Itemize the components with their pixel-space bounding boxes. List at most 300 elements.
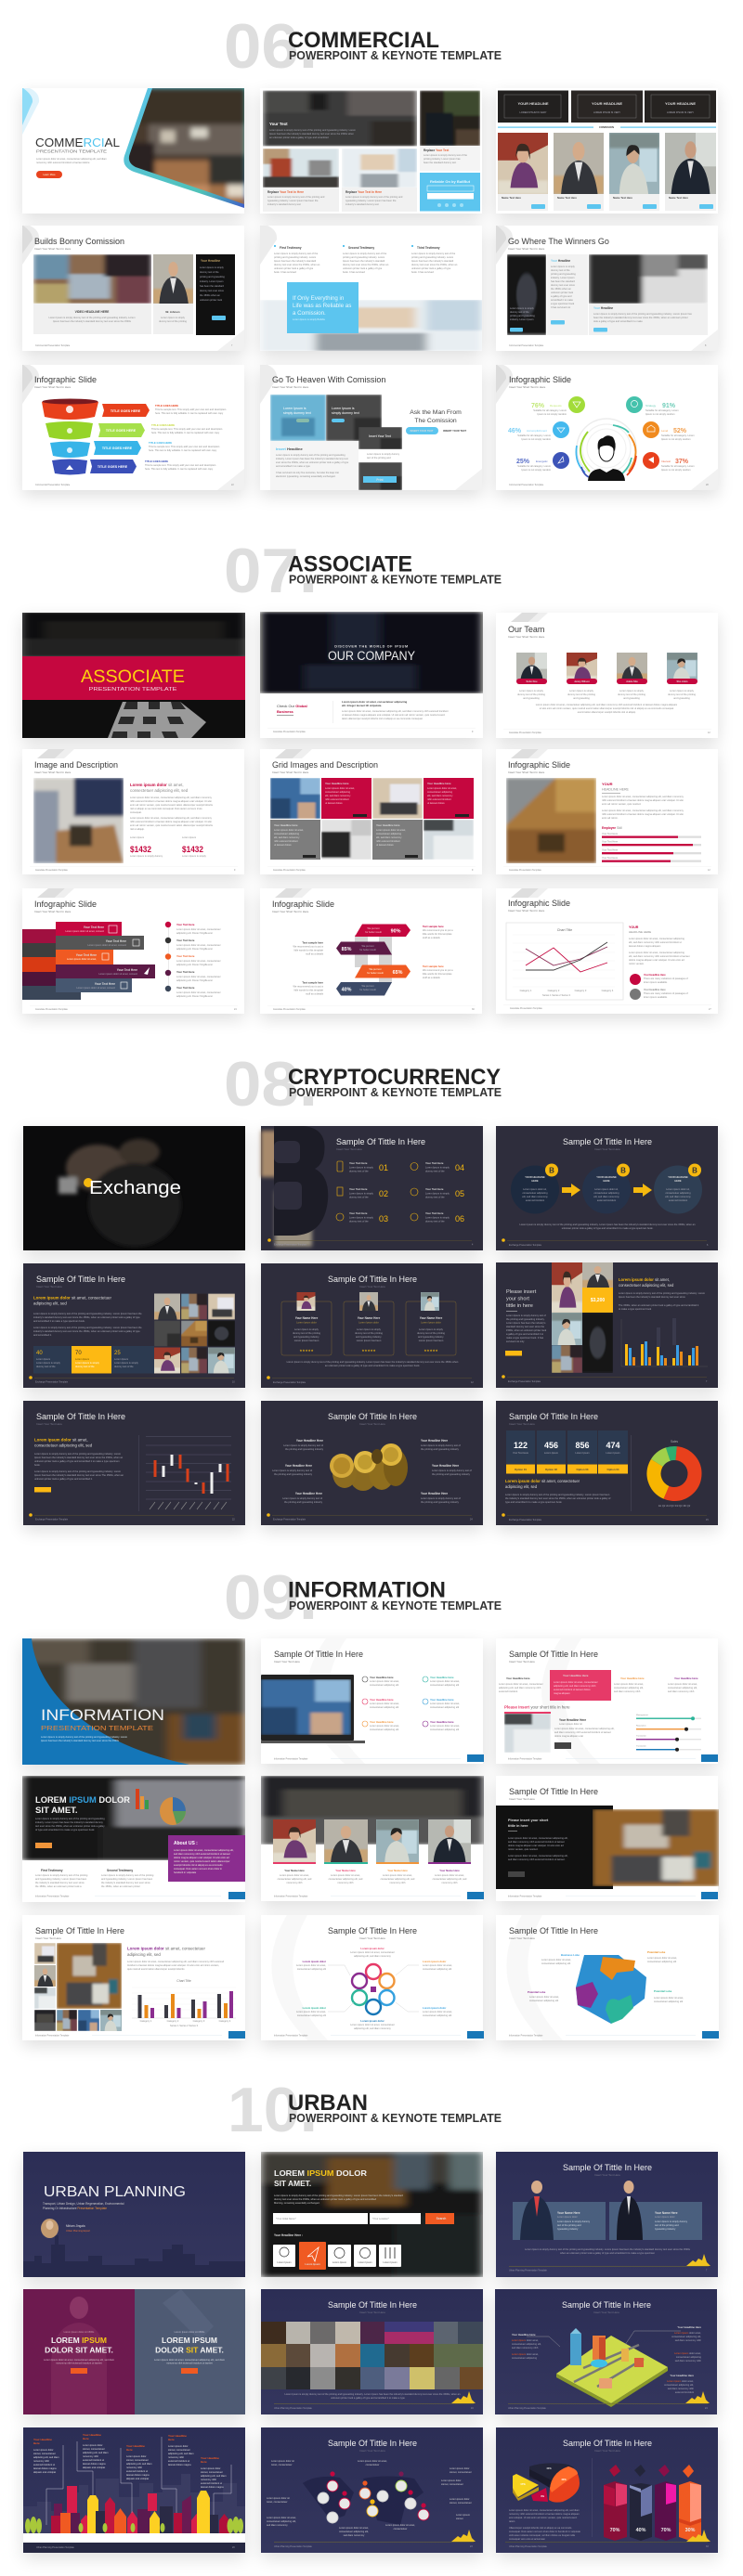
slide: line chart: Lorem ipsum dolor sit amet, consectetuer adipiscing <box>629 951 684 954</box>
slide: arrows percentages: stuff as a details <box>423 936 440 939</box>
slide: crypto agenda: Exchange Presentation Template <box>274 1244 307 1246</box>
slide: arrows percentages: Text sample here <box>423 964 444 968</box>
slide: go where the winners go: industry. Lorem Ipsum <box>510 317 533 321</box>
sliders: Reputation <box>636 1725 646 1727</box>
agenda items: Lorem Ipsum is simply <box>425 1166 450 1170</box>
slide: commercial cover: PRESENTATION TEMPLATE <box>36 149 107 154</box>
slide: crypto coins: Your Headline Here <box>296 1439 323 1443</box>
slide: crypto team cards: Lorem Ipsum is simply dummy text of the printing and typesetting industry. Lorem Ipsum has been the industry's standard dummy text ever since the 1500s when <box>287 1360 459 1364</box>
slide: information split panel: sed diam nonummy nibh euismod tincidunt ut laoreet <box>508 1840 565 1844</box>
slide: commercial testimonies: Ipsum has been the industry's standard <box>274 259 317 263</box>
slide: funnel infographic: This be sample text. This simply add your own text and description <box>149 445 220 448</box>
slide: commercial testimonies: dummy text ever since the 1500s, when an <box>343 263 389 266</box>
slide: commercial photo grid: Ipsum has been the industry's standard dummy text ever since the 1500s when <box>269 132 354 136</box>
slide: crypto candlestick: Exchange Presentation Template <box>35 1519 69 1521</box>
slide: stacked bars infographic <box>22 888 244 1014</box>
slide: urban world map: sed diam nonummy <box>344 2533 365 2537</box>
team cards: Your Name Here <box>420 1316 443 1320</box>
slide: information sliders: Lorem ipsum dolor sit amet, consectetuer <box>499 1682 543 1686</box>
slide: information team: consectetuer adipiscing elit, sed <box>433 1877 467 1881</box>
slide: stacked bars infographic: Your Text Here <box>176 938 195 942</box>
slide: about us: and typesetting industry. Lorem Ipsum has been <box>101 1877 153 1881</box>
team cards: Lorem Ipsum is simply <box>294 1327 319 1331</box>
slide: commercial infographic circle: Requests <box>550 404 562 408</box>
slide: go to heaven: simply dummy text <box>283 411 311 415</box>
slide: urban mosaic: Sample Of Tittle In Here <box>328 2300 417 2310</box>
agenda items: Your Text Here <box>349 1187 368 1191</box>
slide: information sliders: Your Headline Here <box>563 1674 589 1677</box>
callouts: adipiscing elit, sed diam <box>168 2452 194 2455</box>
slide: funnel infographic: Commercial Presentation Template <box>35 484 71 486</box>
slide: arrows percentages: Associate Presentation Template <box>273 1008 306 1011</box>
slide: go to heaven: Lorem Ipsum is simply dummy text of the printing and typesetting <box>276 453 345 457</box>
slide: our team: Associate Presentation Template <box>509 731 541 734</box>
slide: our team: Lorem Ipsum is simply <box>619 689 645 693</box>
slide: crypto stats and photos: and scrambled it to make a type specimen book. <box>33 1319 85 1323</box>
slide: crypto coins: the printing and typesetting industry <box>274 1472 313 1476</box>
slide: information sliders: Please insert your short title in here <box>504 1704 570 1710</box>
3d bars <box>604 2465 701 2541</box>
3d pie: 40% <box>561 2478 567 2481</box>
slide: urban isometric city: consectetuer adipiscing elit, <box>512 2342 541 2346</box>
callouts: laoreet dolore magna <box>33 2466 57 2470</box>
slide: commercial infographic circle: 52% <box>673 428 687 434</box>
slide: crypto photos and bars: Lorem Ipsum is simply dummy text of <box>506 1314 546 1317</box>
stat columns: Option 02 <box>545 1468 557 1471</box>
slide: urban team: Insert Your Text Here <box>594 2173 620 2177</box>
slide: urban search: *Your Location* <box>372 2217 389 2220</box>
callouts: sismet, consectetuer <box>33 2452 56 2455</box>
callouts: Your Headline <box>168 2434 187 2438</box>
slide: urban world map: Lorem ipsum dolor sit amet, <box>358 2459 387 2463</box>
slide: information team: nonummy nibh <box>286 1881 303 1884</box>
slide: crypto candlestick: 22 <box>232 1519 235 1521</box>
slide: grid images and description: consectetuer adipiscing <box>274 832 300 835</box>
slide: about us: About US : <box>174 1841 198 1846</box>
slide: urban world map: Lorem ipsum dolor sit <box>271 2459 294 2463</box>
slide: builds bonny comission: Lorem Ipsum is simply <box>161 316 186 319</box>
callouts: nonummy nibh <box>126 2466 143 2469</box>
slide: crypto photos and bars: consectetuer adipiscing elit, sed <box>619 1283 674 1288</box>
slide: urban team: 7 <box>706 2269 708 2272</box>
callouts: Here <box>83 2437 89 2440</box>
arrow blocks: for better result <box>367 971 384 975</box>
slide: urban world map: 23 <box>470 2545 473 2548</box>
callouts <box>33 2433 231 2525</box>
slide: commercial infographic circle: 28 <box>706 484 709 486</box>
team cards: Lorem Ipsum has been <box>357 1339 382 1342</box>
slide: about us: text ever since the 1500s, when an unknown printer took a galley <box>35 1824 105 1828</box>
callouts: euismod tincidunt ut <box>201 2481 222 2485</box>
slide: our team <box>496 613 718 738</box>
slide: urban search: Your Headline Here : <box>274 2233 303 2237</box>
agenda items: Your Text Here <box>425 1187 444 1191</box>
slide: about us: the industry's standard dummy text ever since <box>35 1881 85 1884</box>
slide: go to heaven: The Comission <box>414 418 457 424</box>
slide: go to heaven: Lorem Ipsum is <box>332 407 355 410</box>
slide: crypto coins: the printing and typesetting industry <box>432 1472 471 1476</box>
slide: crypto donut: Insert Your Text Here <box>509 1422 535 1426</box>
agenda items: 03 <box>379 1214 388 1223</box>
callouts: sismet, consectetuer <box>83 2447 105 2451</box>
slide: stacked bars infographic: Your Text Here <box>176 954 195 958</box>
slide: image and description: Lorem Ipsum is simply dummy <box>130 854 163 858</box>
slide: commercial testimonies: Life was as Reliable as <box>293 303 351 309</box>
agenda items <box>336 1161 464 1223</box>
slide: crypto stats and photos: adipiscing elit, sed <box>33 1301 67 1305</box>
slide: grid images and description: nibh euismod tincidunt <box>325 797 349 801</box>
slide: crypto candlestick: Sample Of Tittle In Here <box>36 1412 125 1421</box>
slide: crypto donut: adipiscing elit, sed <box>505 1484 538 1489</box>
arrow blocks: for better result <box>359 988 376 991</box>
slide: information sliders: Your Headline Here <box>620 1676 645 1680</box>
slide: go to heaven: Ask the Man From <box>410 409 462 416</box>
slide: about us: the industry's standard dummy text ever since <box>101 1881 150 1884</box>
agenda items: Lorem Ipsum is simply <box>425 1192 450 1196</box>
slide: about us: Lorem Ipsum is simply dummy text of the printing <box>101 1873 154 1877</box>
slide: urban split: nonummy nibh euismod tincidunt ut laoreet <box>166 2362 213 2365</box>
agenda items: 06 <box>455 1214 464 1223</box>
slide: urban split: Lorem Ipsum dolor sit amet, consectetuer adipiscing elit, sed diam <box>154 2358 225 2362</box>
slide: crypto stats and photos: Lorem Ipsum is simply dummy text of the printing and typesetting industry. Lorem Ipsum has been the <box>33 1326 142 1329</box>
slide: builds bonny comission: dummy text ever since <box>200 289 225 292</box>
slide: stacked bars infographic: Insert Your Short Text In Here <box>34 910 72 913</box>
slide: line chart: 27 <box>709 1008 711 1011</box>
slide: urban cover <box>23 2152 245 2277</box>
slide: information chart and photos: Lorem ipsum dolor sit amet, consectetuer adipiscing elit, sed diam nonummy nibh euismod <box>127 1960 225 1963</box>
slide: urban world map: Sample Of Tittle In Here <box>328 2439 417 2448</box>
stat boxes: 70 <box>75 1351 82 1356</box>
slide: information flower infographic: consectetuer adipiscing elit <box>423 1967 451 1971</box>
slide: go to heaven: text of the printing and <box>367 456 391 460</box>
slide: information flower infographic: Lorem ipsum dolor <box>360 2019 385 2023</box>
team cards: and typesetting industry. <box>418 1335 444 1339</box>
slide: funnel infographic: Insert Your Short Text In Here <box>34 385 72 389</box>
slide: crypto coins: Lorem Ipsum is simply dummy text of <box>283 1443 323 1447</box>
process ovals: consectetuer adipiscing <box>665 1191 691 1195</box>
feature list: Lorem ipsum dolor sit amet, <box>430 1724 460 1728</box>
letter B shape <box>274 1126 328 1236</box>
feature list: consectetuer adipiscing elit <box>430 1728 459 1731</box>
slide: crypto photos and bars: Lorem Ipsum is simply dummy text of the printing and typesetting industry. Lorem <box>619 1291 705 1295</box>
slide: information team: Lorem ipsum dolor sit amet, <box>280 1873 309 1877</box>
slide: information flower infographic: Lorem ipsum dolor sit amet, <box>296 2010 326 2013</box>
slide: arrows percentages: Text sample here <box>302 941 323 945</box>
slide: commercial testimonies <box>260 226 482 351</box>
slide: crypto photos and bars: The 1500s, when an unknown printer took a galley of type and scrambled it <box>619 1303 699 1307</box>
callouts: Here <box>201 2460 207 2464</box>
headline boxes: LOREM IPSUM IS VERY <box>519 110 547 114</box>
slide: urban isometric city: consectetuer adipiscing <box>512 2356 538 2360</box>
slide: arrows percentages: We recommend you to put a <box>423 928 453 932</box>
feature list: Lorem ipsum dolor sit amet, <box>430 1702 460 1705</box>
slide: go where the winners go: the 1500s when an <box>551 287 571 291</box>
sliders <box>636 1714 701 1752</box>
slide: urban team: typesetting industry <box>655 2227 676 2231</box>
slide: information split panel: minim veniam, quis nostrud. <box>508 1847 539 1851</box>
team cards: Your Name Here <box>358 1316 381 1320</box>
slide: go to heaven: ever since the 1500s, when an unknown printer took a galley of type <box>276 460 349 464</box>
arrow blocks: We put text <box>361 944 374 948</box>
arrow blocks: for better result <box>359 948 376 951</box>
slide: commercial infographic circle: Ipsum is not simply random <box>537 412 567 416</box>
skill bars: Your Text Here <box>602 856 619 860</box>
slide: employee skill: 12 <box>708 869 710 872</box>
slide: crypto process: 6 <box>707 1244 709 1247</box>
slide: information flower infographic <box>261 1915 484 2040</box>
slide: urban isometric city: consectetuer adipiscing elit, <box>671 2335 701 2338</box>
slide: our team: dummy text of the printing <box>567 693 595 696</box>
slide: grid images and description: elit, sed diam nonummy <box>427 794 453 797</box>
slide: information sliders <box>496 1638 718 1764</box>
slide: go where the winners go: Your Headline <box>551 259 570 263</box>
slide: commercial team: Name Text Here <box>669 196 688 200</box>
team cards: Lorem Ipsum dolor <box>421 1320 441 1324</box>
feature list: Lorem ipsum dolor sit amet, <box>370 1724 399 1728</box>
process ovals: consectetuer adipiscing <box>593 1191 619 1195</box>
slide: commercial cover: Learn More <box>43 173 56 176</box>
slide: urban cover: URBAN PLANNING <box>44 2184 186 2200</box>
callouts: Lorem ipsum dolor <box>33 2448 54 2452</box>
slide: go where the winners go: Lorem Ipsum is simply <box>510 306 535 310</box>
slide: crypto donut: Lorem Ipsum is simply dummy text of the printing and typesetting industry. Lorem Ipsum has been <box>505 1493 610 1496</box>
slide: commercial testimonies: a Comission. <box>293 310 326 317</box>
callouts: euismod tincidunt ut <box>83 2458 104 2462</box>
slide: arrows percentages: stuff as a details <box>306 991 324 995</box>
slide: information split panel: tittle in here <box>508 1824 528 1828</box>
slide: image and description: Lorem ipsum dolor sit amet, consectetuer adipiscing elit, sed diam nonummy <box>130 796 213 799</box>
stat columns: Option 01 <box>515 1468 527 1471</box>
slide: stacked bars infographic: Your Text Here <box>176 986 195 990</box>
slide: urban search: Morning, remaining essentially unchanged. <box>274 2201 320 2205</box>
slide: crypto candlestick: book. <box>34 1463 41 1467</box>
slide: crypto coins: Exchange Presentation Template <box>273 1519 306 1521</box>
slide: crypto process: Sample Of Tittle In Here <box>563 1137 652 1146</box>
slide: urban 3d pie and bars: Urban Planning Presentation Template <box>509 2545 548 2548</box>
slide: our team: Lorem Ipsum is simply <box>519 689 544 693</box>
process ovals: YOUR HEADLINE <box>596 1175 617 1179</box>
slide: information sliders: dolore magna aliquam erat <box>554 1734 583 1738</box>
slide: our team: and typesetting <box>623 696 640 700</box>
slide: information chart and photos: adipiscing elit, sed <box>127 1952 161 1957</box>
line chart: Category 1 <box>520 989 532 992</box>
grouped bar chart: Category 3 <box>193 2019 205 2023</box>
process ovals: Lorem ipsum dolor sit, <box>523 1187 547 1191</box>
slide: grid images and description: elit, sed diam nonummy <box>274 835 300 839</box>
slide: urban 3d pie and bars: nonummy nibh euismod tincidunt ut laoreet dolore magna aliquam <box>509 2512 580 2516</box>
heading: 10 Urban: URBAN <box>288 2091 368 2116</box>
slide: grid images and description: Lorem ipsum dolor sit amet, <box>325 786 355 790</box>
agenda items: dummy text of the <box>425 1170 445 1173</box>
stat columns <box>506 1430 628 1474</box>
slide: funnel infographic: TITLE GOES HERE <box>149 441 172 445</box>
stacked ribbons: Lorem ipsum dolor sit amet, consect <box>87 943 126 947</box>
slide: crypto photos and bars: standard dummy text ever since the <box>506 1325 545 1328</box>
callouts: Here <box>33 2441 40 2445</box>
agenda items: 05 <box>455 1189 464 1198</box>
slide: urban split: Lorem Ipsum dolor sit 1500s <box>64 2330 95 2334</box>
slide: stacked bars infographic: Associate Presentation Template <box>35 1008 68 1011</box>
slide: exchange cover <box>23 1126 245 1250</box>
slide: crypto stats and photos: industry's standard dummy text ever since the 1500s, when an unknown printer took a galley of type <box>33 1315 140 1319</box>
slide: image and description: Lorem ipsum dolor sit amet, <box>130 783 184 787</box>
slide: urban team: Sample Of Tittle In Here <box>563 2163 652 2172</box>
slide: commercial team: COMISSION <box>599 125 614 129</box>
slide: information team: nonummy nibh <box>337 1881 354 1884</box>
slide: urban split: Lorem Ipsum dolor sit 1500s <box>175 2330 205 2334</box>
slide: our team: dummy text of the printing <box>618 693 645 696</box>
slide: grid images and description: consectetuer adipiscing <box>325 790 351 794</box>
slide: urban mosaic: unknown printer took a galley of type and scrambled it to make a type <box>331 2396 405 2400</box>
line chart: Chart Title <box>557 928 572 932</box>
sliders: Translation <box>636 1745 647 1747</box>
slide: commercial infographic circle: Suitable for all category. Lorem <box>533 408 567 412</box>
process ovals: HERE <box>674 1179 682 1183</box>
agenda items: 02 <box>379 1189 388 1198</box>
slide: grid images and description: consectetuer adipiscing <box>376 832 402 835</box>
slide: about us: SIT AMET. <box>35 1806 78 1816</box>
heading: 09 Information <box>224 1562 502 1633</box>
heading: 06 Commercial: POWERPOINT & KEYNOTE TEMPLATE <box>289 49 502 62</box>
team cards: and typesetting industry. <box>356 1335 382 1339</box>
feature list: Your Headline Here <box>370 1676 394 1679</box>
stat columns: Lorem Ipsum <box>544 1451 558 1455</box>
slide: our company: Check Our Global <box>277 704 307 708</box>
slide: funnel infographic: This be sample text. This simply add your own text and description <box>155 408 227 411</box>
slide: commercial infographic circle: Infographic Slide <box>509 375 571 384</box>
callouts: Lorem ipsum dolor <box>83 2443 103 2447</box>
slide: line chart: Lorem ipsum dolor sit amet, consectetuer adipiscing <box>629 937 684 940</box>
slide: urban split: nonummy nibh euismod tincidunt ut laoreet <box>56 2362 102 2365</box>
slide: crypto team cards: an unknown printer took a galley of type and scrambled it to make a type specimen book. <box>325 1364 420 1367</box>
feature list: Lorem ipsum dolor sit amet, <box>430 1679 460 1683</box>
slide: grid images and description: Insert Your Short Text In Here <box>272 770 309 774</box>
slide: crypto team cards <box>261 1263 483 1388</box>
slide: urban split: LOREM IPSUM <box>162 2336 217 2345</box>
slide: commercial testimonies: First Testimony <box>280 246 302 250</box>
slide: crypto coins: 24 <box>470 1519 473 1521</box>
icon tiles: Lorem Ipsum <box>332 2260 346 2264</box>
agenda items: 04 <box>455 1163 464 1172</box>
slide: image and description: Lorem Ipsum <box>130 835 144 839</box>
heading: 10 Urban <box>228 2075 502 2145</box>
slide: builds bonny comission: dummy text of the printing <box>159 319 187 323</box>
slide: urban isometric city: Urban Planning Presentation Template <box>508 2407 547 2410</box>
slide: our company: tation ullamcorper suscipit lobortis nisl ut aliquip ex ea commodo consequat. <box>342 717 424 720</box>
slide: information chart and photos: Insert Your Text Here <box>35 1936 61 1940</box>
agenda items: dummy text of the <box>425 1196 445 1199</box>
slide: crypto coins: Insert Your Text Here <box>359 1422 385 1426</box>
slide: arrows percentages: little words for this template <box>423 972 452 976</box>
grouped bar chart: Category 2 <box>167 2019 179 2023</box>
stat columns: 474 <box>606 1441 620 1450</box>
slide: grid images and description: Lorem ipsum dolor sit amet, <box>376 828 406 832</box>
slide: crypto agenda: Insert Your Text Here <box>336 1147 362 1151</box>
slide: crypto candlestick: Insert Your Text Here <box>36 1422 62 1426</box>
slide: our team: Adele Site <box>626 680 638 683</box>
candlestick chart <box>146 1437 231 1509</box>
slide: urban split <box>23 2289 245 2414</box>
slide: information puzzle cube: Information Presentation Template <box>509 2035 543 2037</box>
slide: commercial testimonies: Third Testimony <box>417 246 440 250</box>
slide: information sliders: Insert Your Text Here <box>509 1660 535 1663</box>
slide: employee skill: Associate Presentation Template <box>509 869 541 872</box>
slide: commercial cover: COMMERCIAL <box>35 136 120 149</box>
slide: information split panel: Insert Your Text Here <box>509 1797 535 1801</box>
slide: crypto team cards: Exchange Presentation Template <box>273 1381 306 1384</box>
slide: information puzzle cube: consectetuer adipiscing elit <box>654 2000 683 2003</box>
slide: image and description: $1432 <box>182 845 203 854</box>
agenda items: Your Text Here <box>349 1161 368 1165</box>
heading: 08 Cryptocurrency: CRYPTOCURRENCY <box>288 1065 501 1090</box>
slide: crypto stats and photos: 10 <box>232 1381 235 1383</box>
slide: urban search: Lorem Ipsum is simply dummy text of the printing and typesetting industry. Lorem Ipsum has been the industry's standard <box>274 2194 404 2197</box>
slide: commercial infographic circle: Level <box>661 429 669 433</box>
icon tiles: Lorem Ipsum <box>358 2260 372 2264</box>
laptop <box>261 1675 365 1743</box>
feature list: consectetuer adipiscing elit <box>370 1683 398 1687</box>
slide: builds bonny comission: Mr. Johnson <box>165 310 180 314</box>
slide: commercial team <box>496 88 718 214</box>
slide: crypto coins: Lorem Ipsum is simply dummy text of <box>282 1496 322 1500</box>
slide: builds bonny comission: Ipsum has been the industry's standard dummy text ever since the 1500s <box>53 319 132 323</box>
slide: commercial infographic circle: 37% <box>675 459 689 465</box>
slide: stacked bars infographic: adipiscing elit. Donec fringilla erat <box>176 978 213 982</box>
slide: commercial cover: Lorem ipsum dolor sit amet, consectetuer adipiscing elit, sed diam <box>36 157 107 161</box>
slide: urban isometric city <box>495 2289 717 2414</box>
slide: urban team: Your Name Here <box>557 2211 580 2215</box>
slide: crypto stats and photos: Insert Your Text Here <box>36 1285 62 1288</box>
agenda items: dummy text of the <box>425 1220 445 1223</box>
feature list: Your Headline Here <box>430 1676 454 1679</box>
slide: crypto photos and bars: Exchange Presentation Template <box>508 1380 541 1383</box>
slide: urban search: *Your Initial Name* <box>276 2217 296 2220</box>
slide: information flower infographic: Lorem ipsum dolor sit amet, consectetuer <box>350 2023 395 2026</box>
callouts: Here <box>126 2448 133 2452</box>
slide: urban isometric city: Lorem Ipsum dolor amet, <box>674 2351 701 2355</box>
skill bars <box>602 832 701 862</box>
slide: commercial testimonies: book. It has survived <box>343 270 365 274</box>
slide: our team: and typesetting <box>523 696 540 700</box>
slide: go to heaven <box>260 365 482 490</box>
team cards: dummy text of the printing <box>355 1331 383 1335</box>
slide: commercial infographic circle: 25% <box>516 459 530 465</box>
slide: information sliders: adipiscing elit, sed diam nonummy nibh <box>554 1684 596 1688</box>
callouts: adipiscing elit, sed diam <box>201 2474 227 2478</box>
slide: go where the winners go: printing and typesetting <box>551 272 576 276</box>
slide: line chart: elit, sed diam nonummy nibh euismod tincidunt ut <box>629 940 682 944</box>
slide: urban world map: sismet, consectetuer <box>441 2482 463 2486</box>
team cards: ★★★★★ <box>424 1349 438 1353</box>
slide: urban world map: consectetuer adipiscing elit, <box>267 2519 296 2523</box>
headline boxes <box>498 91 716 123</box>
slide: image and description: Insert Your Short Text In Here <box>34 770 72 774</box>
slide: information chart and photos: Information Presentation Template <box>35 2035 70 2037</box>
heading: 09 Information: POWERPOINT & KEYNOTE TEMPLATE <box>289 1599 502 1612</box>
slide: go where the winners go: unknown printer took <box>551 291 574 294</box>
agenda items: dummy text of the <box>349 1220 369 1223</box>
3d pie <box>513 2463 580 2503</box>
slide: information team: nonummy nibh <box>389 1881 406 1884</box>
callouts: laoreet dolore magna <box>168 2463 191 2466</box>
slide: urban isometric city: Your Headline Here <box>670 2374 694 2377</box>
slide: urban isometric city: consectetuer adipiscing elit, <box>664 2383 694 2387</box>
callouts: Here <box>168 2438 175 2441</box>
team cards: ★★★★★ <box>361 1349 376 1353</box>
stacked ribbons: Lorem ipsum dolor sit amet, consect <box>76 986 115 990</box>
slide: urban skyline: 20 <box>232 2546 235 2549</box>
slide: urban world map: Lorem ipsum dolor sit <box>267 2496 290 2500</box>
